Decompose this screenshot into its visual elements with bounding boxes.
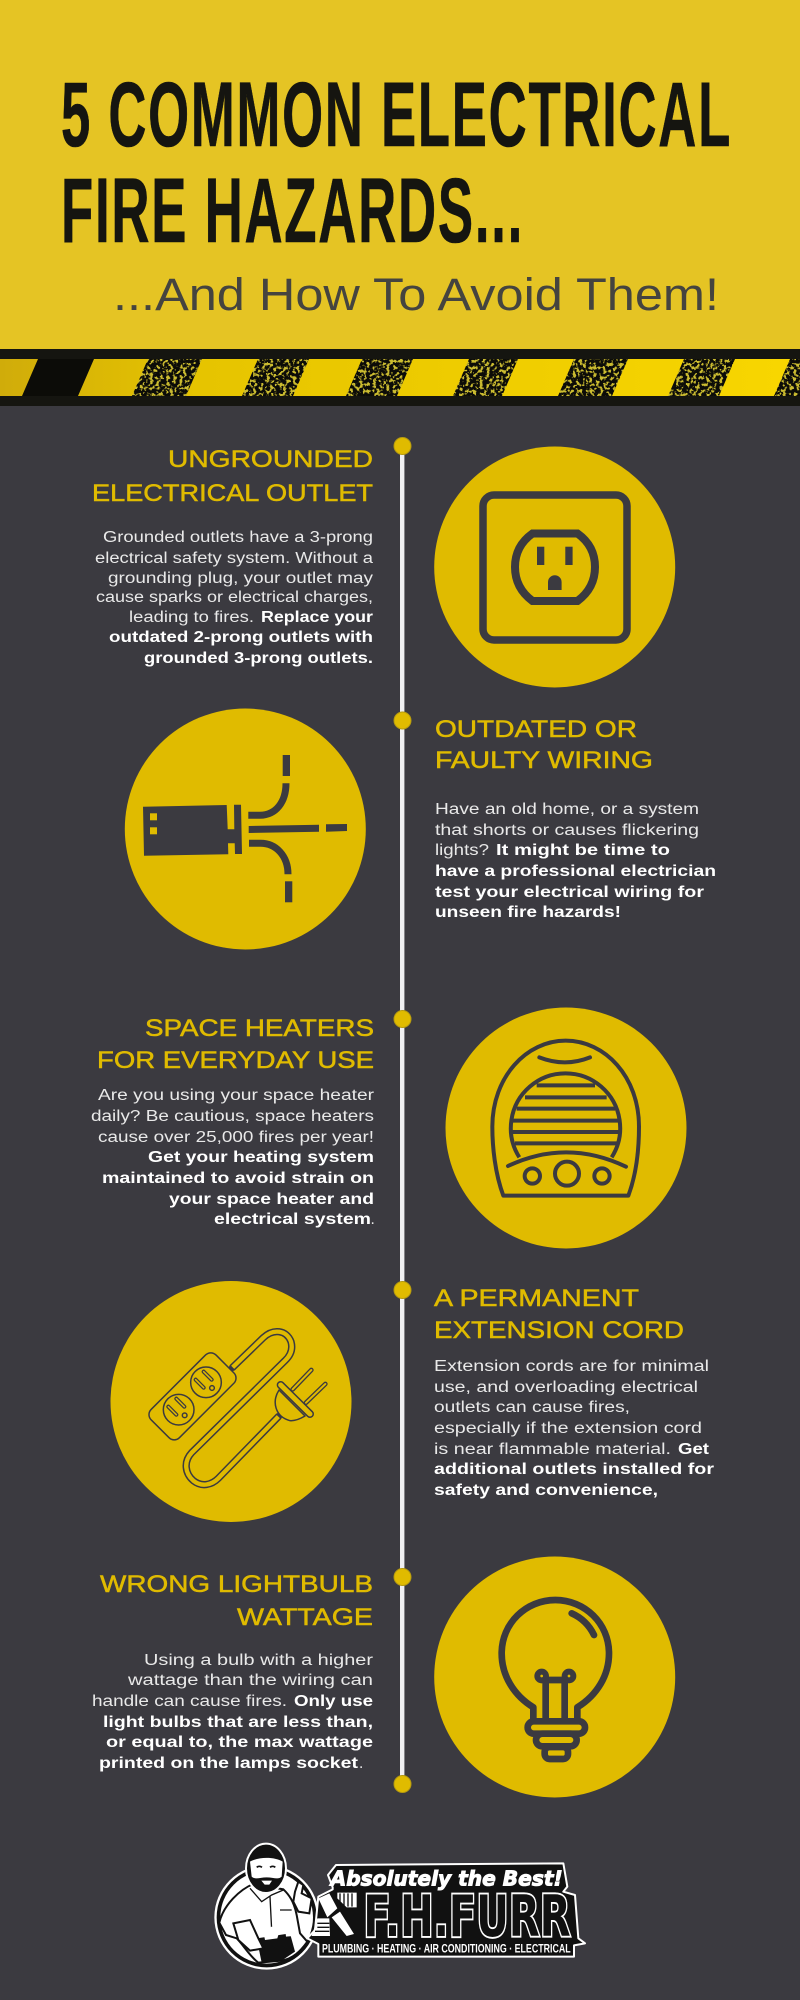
body text: Only use (294, 1693, 373, 1710)
body text: is near flammable material. (434, 1441, 671, 1458)
body text: especially if the extension cord (434, 1420, 702, 1437)
body text (91, 1087, 375, 1228)
body text: lights? (435, 842, 489, 859)
body text: printed on the lamps socket (99, 1755, 358, 1772)
body text: It might be time to (496, 842, 670, 859)
body text: unseen fire hazards! (435, 904, 621, 921)
body text: wattage than the wiring can (127, 1672, 373, 1689)
body text: Get your heating system (148, 1149, 374, 1166)
tagline: Absolutely the Best! (329, 1866, 563, 1890)
heading: UNGROUNDED (168, 446, 373, 473)
body text: electrical safety system. Without a (95, 550, 373, 567)
logo: F.H. Furr (214, 1844, 585, 1970)
body text (95, 529, 373, 667)
icon: wires (125, 708, 366, 950)
timeline (394, 438, 411, 1792)
body text: outdated 2-prong outlets with (109, 629, 373, 646)
body text: that shorts or causes flickering (435, 822, 699, 839)
panel: ungrounded electrical outlet (92, 446, 675, 688)
body text: Are you using your space heater (98, 1087, 374, 1104)
services line: PLUMBING · HEATING · AIR CONDITIONING · ELECTRICAL (322, 1942, 571, 1955)
panel: header (0, 0, 800, 406)
company name: F.H.FURR (363, 1883, 571, 1950)
body text: Replace your (261, 609, 373, 626)
body text: test your electrical wiring for (435, 884, 704, 901)
body text: Extension cords are for minimal (434, 1358, 709, 1375)
heading (435, 716, 653, 774)
body text: handle can cause fires. (92, 1693, 287, 1710)
body text: leading to fires. (129, 609, 254, 626)
body text: Have an old home, or a system (435, 801, 699, 818)
logo text block (307, 1863, 585, 1957)
panel: a permanent extension cord (110, 1281, 714, 1522)
icon: wall outlet (434, 446, 675, 688)
body text: . (370, 1211, 375, 1228)
body text: cause sparks or electrical charges, (96, 589, 373, 606)
heading: EXTENSION CORD (434, 1317, 684, 1344)
body text: have a professional electrician (435, 863, 716, 880)
heading: FOR EVERYDAY USE (97, 1047, 374, 1074)
body text: . (359, 1755, 363, 1772)
heading: WATTAGE (237, 1604, 373, 1631)
heading: FAULTY WIRING (435, 747, 653, 774)
icon: light bulb (434, 1556, 675, 1798)
body text: safety and convenience, (434, 1482, 658, 1499)
body text: electrical system (214, 1211, 371, 1228)
subtitle: ...And How To Avoid Them! (113, 269, 719, 320)
heading: ELECTRICAL OUTLET (92, 480, 373, 507)
hazard stripe band (0, 349, 800, 406)
body text: or equal to, the max wattage (106, 1734, 373, 1751)
panel: wrong lightbulb wattage (92, 1556, 675, 1798)
body text: additional outlets installed for (434, 1461, 714, 1478)
heading: WRONG LIGHTBULB (100, 1571, 373, 1598)
body text: outlets can cause fires, (434, 1399, 630, 1416)
body text: grounding plug, your outlet may (108, 570, 373, 587)
body text: grounded 3-prong outlets. (144, 650, 373, 667)
heading (97, 1015, 374, 1074)
body text: daily? Be cautious, space heaters (91, 1108, 374, 1125)
mascot badge (214, 1844, 319, 1970)
body text: use, and overloading electrical (434, 1379, 698, 1396)
panel: outdated or faulty wiring (125, 708, 716, 950)
icon: space heater (446, 1008, 686, 1248)
body text: Using a bulb with a higher (144, 1652, 373, 1669)
panel: space heaters for everyday use (91, 1008, 686, 1248)
title (61, 64, 732, 262)
mascot head (246, 1844, 286, 1893)
body text: your space heater and (169, 1191, 374, 1208)
heading (100, 1571, 373, 1631)
heading: OUTDATED OR (435, 716, 637, 743)
mascot body (219, 1884, 307, 1963)
body text: light bulbs that are less than, (103, 1714, 373, 1731)
heading (92, 446, 373, 507)
brush icon (312, 1893, 357, 1936)
icon: extension cord (110, 1281, 352, 1522)
heading: A PERMANENT (434, 1285, 639, 1312)
heading (434, 1285, 684, 1344)
body text: Get (678, 1441, 709, 1458)
body text: Grounded outlets have a 3-prong (103, 529, 373, 546)
body text: cause over 25,000 fires per year! (98, 1129, 374, 1146)
header yellow background (0, 0, 800, 349)
body text (435, 801, 716, 921)
body text: maintained to avoid strain on (102, 1170, 374, 1187)
heading: SPACE HEATERS (145, 1015, 374, 1042)
body text (434, 1358, 714, 1499)
body text (92, 1652, 373, 1772)
